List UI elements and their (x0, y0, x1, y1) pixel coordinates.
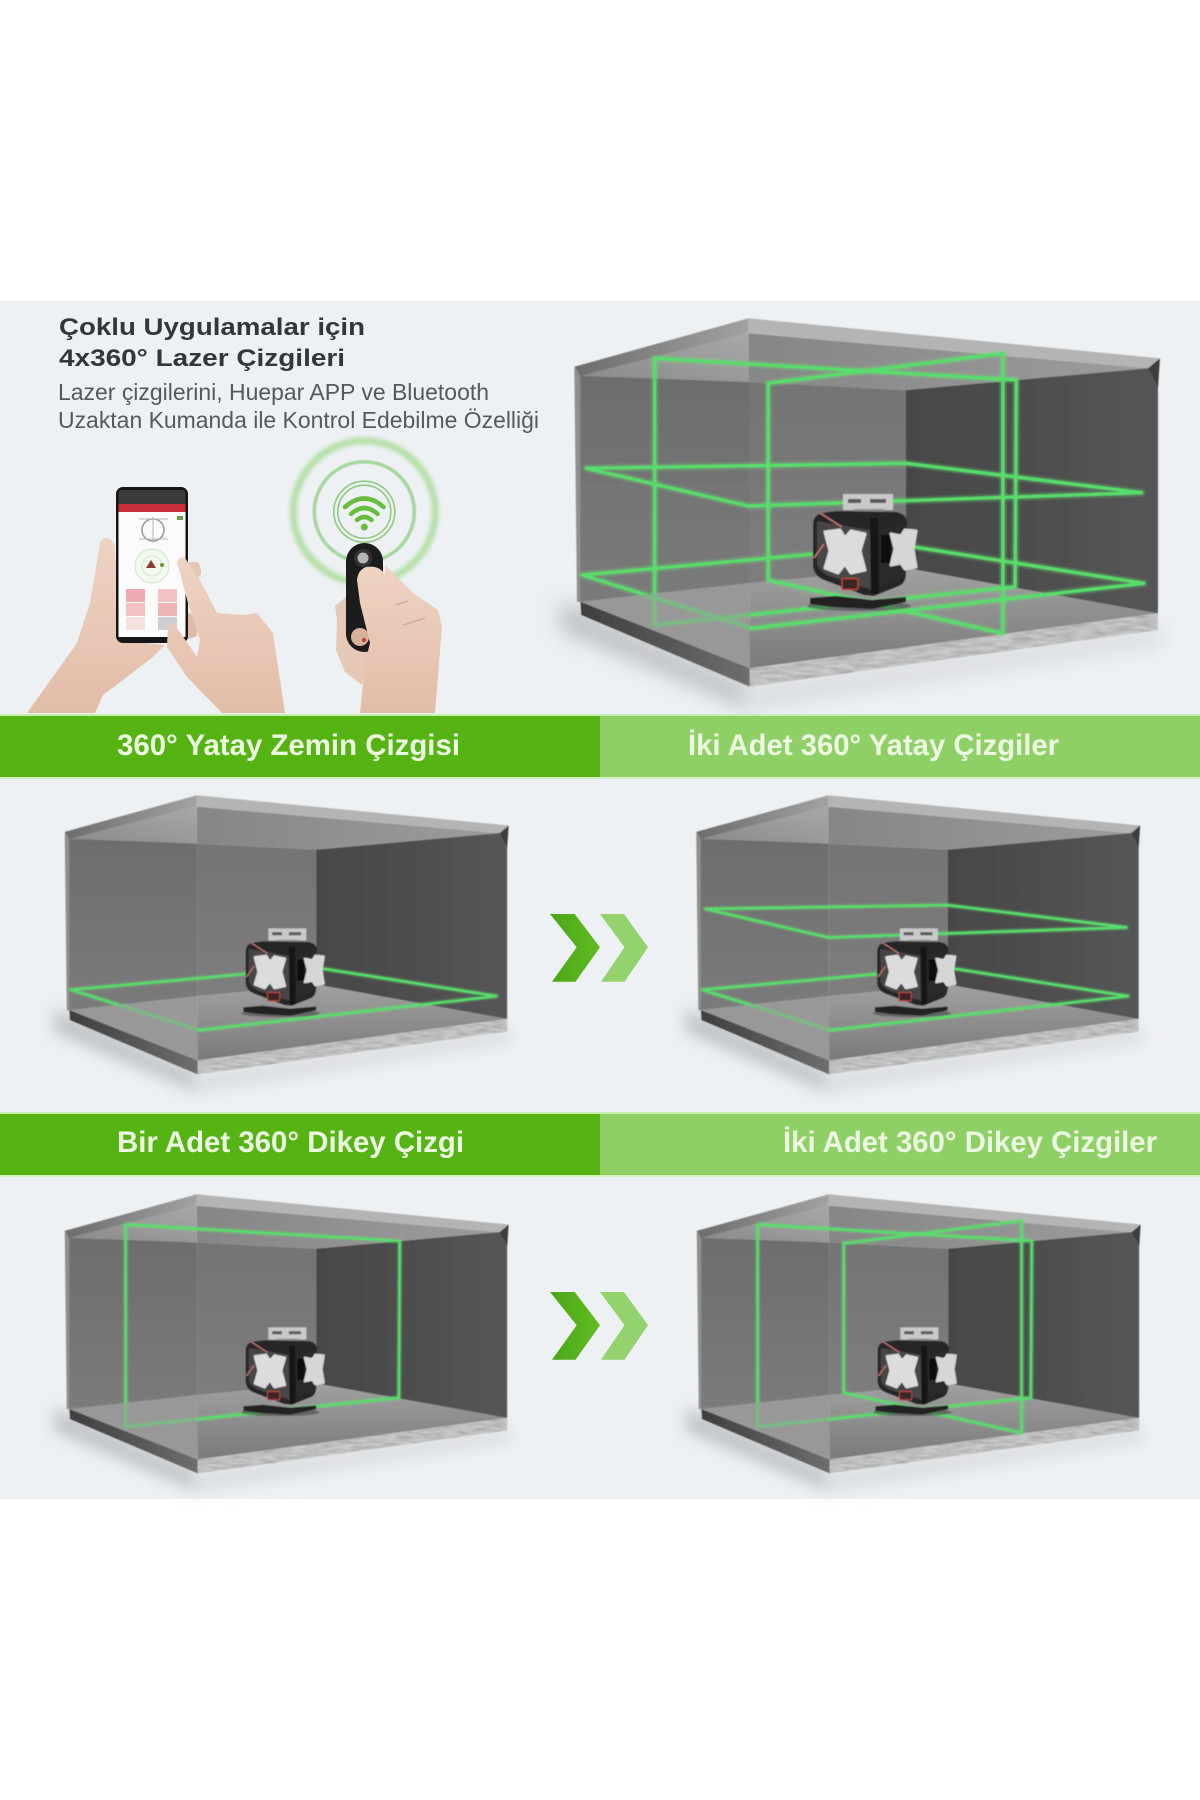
room diagram: all four laser planes (560, 318, 1164, 710)
description text: Uzaktan Kumanda ile Kontrol Edebilme Özelliği (58, 407, 539, 433)
room diagram: floor line (54, 795, 512, 1092)
band label: one vertical line: Bir Adet 360° Dikey Çizgi (117, 1126, 464, 1159)
grey-blue infographic panel (0, 301, 1200, 1499)
arrows: double chevron row 1 (550, 914, 648, 982)
icon: wifi symbol (345, 498, 384, 530)
band label: floor line: 360° Yatay Zemin Çizgisi (117, 729, 460, 762)
heading: multi-application laser lines: Çoklu Uygulamalar için (59, 314, 365, 341)
room diagram: two vertical lines (686, 1194, 1144, 1491)
illustration: pointing hand (167, 558, 285, 713)
green band row 1 (0, 714, 1200, 779)
band label: two horizontal lines: İki Adet 360° Yatay Çizgiler (688, 729, 1060, 762)
illustration: hand holding phone with app (27, 487, 285, 713)
room diagram: two horizontal lines (685, 795, 1143, 1092)
illustration: hand with remote control (335, 543, 442, 713)
heading: multi-application laser lines: 4x360° Lazer Çizgileri (59, 345, 345, 372)
room diagram: one vertical line (54, 1194, 512, 1491)
description text (58, 379, 539, 433)
icon: remote control (346, 543, 383, 652)
description text: Lazer çizgilerini, Huepar APP ve Bluetooth (58, 379, 489, 405)
band label: two vertical lines: İki Adet 360° Dikey Çizgiler (783, 1126, 1158, 1159)
icon: smartphone (116, 487, 188, 643)
icon: bluetooth signal rings (293, 441, 435, 583)
green band row 2 (0, 1112, 1200, 1177)
arrows: double chevron row 2 (550, 1292, 648, 1360)
heading: multi-application laser lines (59, 314, 365, 372)
